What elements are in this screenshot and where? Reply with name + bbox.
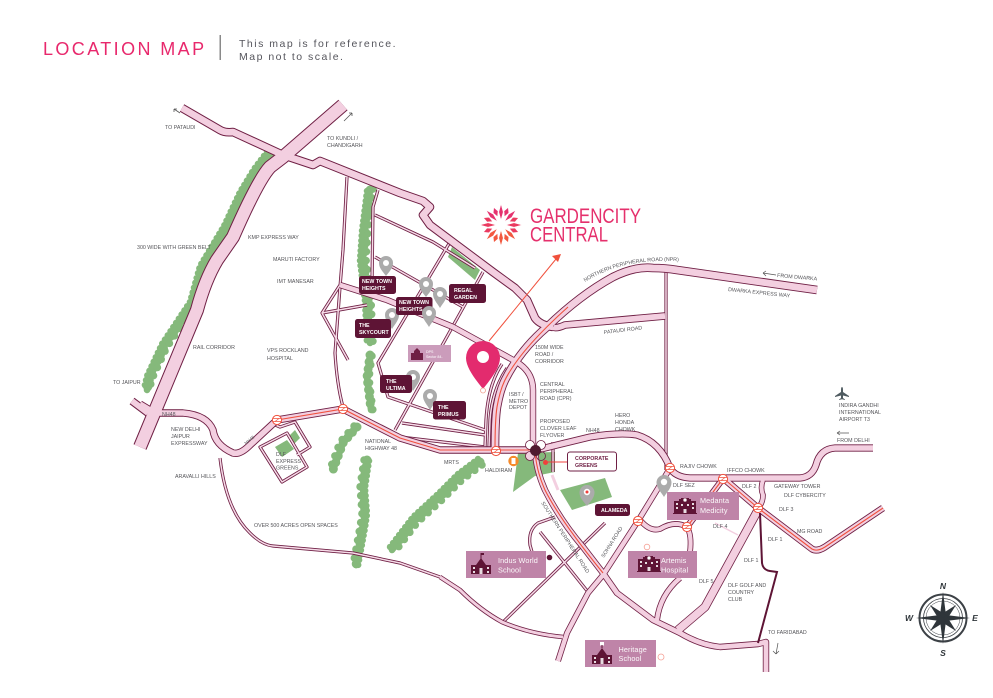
metro: CPR junction bbox=[491, 446, 501, 456]
marker: indus bbox=[547, 555, 552, 560]
map labels: NORTHERN PERIPHERAL ROAD (NPR) bbox=[584, 257, 678, 282]
arrow: from Delhi bbox=[837, 431, 849, 435]
map labels: TO PATAUDI bbox=[165, 125, 196, 131]
label: the ultima: ULTIMA bbox=[386, 386, 406, 392]
compass rose: N bbox=[940, 581, 947, 591]
map labels: HOSPITAL bbox=[267, 356, 293, 362]
map labels: DLF 1 bbox=[744, 558, 758, 564]
map labels: CHOWK bbox=[615, 427, 636, 433]
arrow from site to logo bbox=[489, 254, 561, 341]
map labels: NEW DELHI bbox=[171, 427, 200, 433]
map labels: SOHNA ROAD bbox=[601, 526, 625, 559]
map labels: CLOVER LEAF bbox=[540, 426, 577, 432]
subtitle note: This map is for reference. bbox=[239, 38, 397, 50]
map labels: DEPOT bbox=[509, 405, 528, 411]
label: the primus: PRIMUS bbox=[438, 412, 459, 418]
panel: Indus World School bbox=[466, 551, 546, 578]
map labels: OVER 500 ACRES OPEN SPACES bbox=[254, 523, 338, 529]
map labels: TO KUNDLI / bbox=[327, 136, 359, 142]
map labels: MARUTI FACTORY bbox=[273, 257, 320, 263]
map labels: JAIPUR bbox=[171, 434, 190, 440]
panel: Artemis Hospital: Artemis bbox=[661, 556, 687, 565]
label: the primus bbox=[433, 401, 466, 420]
icon: hospital bbox=[673, 498, 697, 514]
thin double-line local roads bbox=[220, 177, 738, 622]
map labels: ARAVALLI HILLS bbox=[175, 474, 216, 480]
road: DLF 1 bbox=[678, 510, 758, 630]
callout: corporate greens: GREENS bbox=[575, 463, 598, 469]
map labels: DLF SEZ bbox=[673, 483, 696, 489]
label: new town heights: NEW TOWN bbox=[362, 279, 392, 285]
road: KMP expressway bbox=[140, 105, 343, 447]
metro: NH48 west bbox=[272, 415, 282, 425]
compass rose: W bbox=[905, 613, 914, 623]
label: the ultima: THE bbox=[386, 379, 397, 385]
label: new town heights: HEIGHTS bbox=[362, 286, 386, 292]
map labels: IFFCO CHOWK bbox=[727, 468, 765, 474]
map labels: FROM DWARKA bbox=[777, 273, 818, 283]
map labels: DLF 5 bbox=[699, 579, 713, 585]
subtitle note: Map not to scale. bbox=[239, 51, 344, 63]
map labels: AIRPORT T3 bbox=[839, 417, 870, 423]
label: regal garden: GARDEN bbox=[454, 295, 477, 301]
map labels: IMT MANESAR bbox=[277, 279, 314, 285]
pin: central bbox=[422, 306, 436, 327]
pin: regal garden bbox=[433, 287, 447, 308]
road fills bbox=[132, 105, 883, 672]
arrow: from Dwarka bbox=[763, 271, 776, 276]
label: the primus: THE bbox=[438, 405, 449, 411]
arrow: to Faridabad bbox=[773, 643, 779, 654]
map labels: HONDA bbox=[615, 420, 635, 426]
compass rose bbox=[905, 581, 978, 658]
icon: haldiram marker bbox=[508, 456, 519, 466]
panel: Medanta Medicity: Medicity bbox=[700, 506, 728, 515]
marker: heritage bbox=[658, 654, 664, 660]
logo wordmark: GARDENCITY bbox=[530, 205, 641, 228]
panel: Indus World School: Indus World bbox=[498, 556, 538, 565]
panel: Heritage School: School bbox=[618, 654, 642, 663]
green belt: below highway bbox=[330, 426, 369, 566]
road: NH48 west bbox=[140, 404, 537, 453]
panel: Heritage School: Heritage bbox=[618, 645, 647, 654]
road: NH48 east to Delhi bbox=[537, 434, 873, 478]
road: DLF 5 link bbox=[657, 578, 680, 620]
road: MG road bbox=[723, 478, 883, 550]
callout: corporate greens bbox=[543, 452, 616, 471]
label: the skycourt: SKYCOURT bbox=[359, 330, 389, 336]
map labels: VPS ROCKLAND bbox=[267, 348, 309, 354]
map labels: METRO bbox=[509, 399, 528, 405]
label: the ultima bbox=[380, 375, 412, 393]
label: the skycourt: THE bbox=[359, 323, 370, 329]
divider line beside title bbox=[220, 35, 221, 60]
map labels: DWARKA EXPRESS WAY bbox=[728, 287, 791, 300]
road: Pataudi to Kundli bbox=[182, 108, 553, 327]
panel: Indus World School: School bbox=[498, 566, 521, 575]
green belt: MRTS corridor bbox=[390, 459, 482, 553]
site pin: gardencity central bbox=[466, 341, 500, 393]
metro stations bbox=[272, 404, 763, 532]
map labels: ISBT / bbox=[509, 392, 524, 398]
icon: airplane bbox=[835, 387, 849, 400]
map labels: HIGHWAY 48 bbox=[365, 446, 397, 452]
map labels: DLF 3 bbox=[779, 507, 793, 513]
map labels: MG ROAD bbox=[797, 529, 822, 535]
pin: ultima bbox=[406, 370, 420, 391]
green belt: central upper bbox=[360, 189, 373, 411]
map labels: PROPOSED bbox=[540, 419, 570, 425]
road end arrow: to Pataudi bbox=[174, 109, 180, 113]
logo wordmark: CENTRAL bbox=[530, 224, 608, 246]
green area: DLF express greens bbox=[275, 430, 300, 457]
road outlines bbox=[132, 105, 883, 672]
label: alameda bbox=[595, 504, 630, 516]
label: new town heights 2: HEIGHTS bbox=[399, 307, 423, 313]
map labels bbox=[113, 125, 881, 636]
panel: Artemis Hospital: Hospital bbox=[661, 566, 688, 574]
map labels: CHANDIGARH bbox=[327, 143, 363, 149]
panel: DPS sector 84: DPS bbox=[426, 350, 434, 354]
panel: Medanta Medicity bbox=[667, 492, 739, 520]
map labels: DLF bbox=[276, 452, 287, 458]
icon: hospital bbox=[637, 556, 661, 572]
map labels: TO JAIPUR bbox=[113, 380, 141, 386]
map labels: ROAD (CPR) bbox=[540, 396, 572, 402]
pin: skycourt bbox=[385, 308, 399, 329]
map labels: DLF GOLF AND bbox=[728, 583, 766, 589]
road: Faridabad dark road bbox=[758, 513, 777, 643]
map labels: ROAD / bbox=[535, 352, 554, 358]
metro: IFFCO Chowk bbox=[718, 474, 728, 484]
metro: Cybercity bbox=[753, 503, 763, 513]
metro: NH48 centre bbox=[338, 404, 348, 414]
road: Medanta link bbox=[687, 480, 722, 527]
metro corridor red lines bbox=[277, 307, 883, 573]
road: northern peripheral road bbox=[495, 268, 817, 450]
panel: DPS sector 84: Sector 84- bbox=[426, 355, 443, 359]
map labels: 300 WIDE WITH GREEN BELT bbox=[137, 245, 212, 251]
icon: school bbox=[471, 553, 491, 574]
map labels: 150M WIDE bbox=[535, 345, 564, 351]
panel: Heritage School bbox=[585, 640, 656, 667]
panel: Medanta Medicity: Medanta bbox=[700, 496, 730, 505]
panel: DPS sector 84 bbox=[408, 345, 451, 362]
title: location map: LOCATION MAP bbox=[43, 39, 206, 59]
map labels: GREENS bbox=[276, 466, 299, 472]
panel: Artemis Hospital bbox=[628, 551, 697, 578]
map labels: EXPRESSWAY bbox=[171, 441, 208, 447]
label: new town heights 2 bbox=[396, 297, 432, 315]
map labels: CENTRAL bbox=[540, 382, 565, 388]
pin: new town heights bbox=[419, 277, 433, 297]
map labels: NH48 bbox=[243, 434, 256, 446]
green area: alameda bbox=[560, 478, 612, 510]
marker: artemis bbox=[644, 544, 650, 550]
label: new town heights 2: NEW TOWN bbox=[399, 300, 429, 306]
road: Pataudi road bbox=[553, 316, 665, 328]
green area: sector park bbox=[448, 247, 480, 280]
clover leaf flyover bbox=[526, 440, 546, 460]
grey location pins bbox=[379, 256, 672, 506]
road: central peripheral road bbox=[340, 285, 533, 450]
label: alameda: ALAMEDA bbox=[601, 508, 628, 514]
map labels: SOUTHERN PERIPHERAL ROAD bbox=[539, 501, 590, 575]
map labels: TO FARIDABAD bbox=[768, 630, 807, 636]
map labels: RAIL CORRIDOR bbox=[193, 345, 235, 351]
road: Sohna road bbox=[558, 468, 670, 661]
green area: corporate greens bbox=[513, 452, 555, 492]
map labels: NH48 bbox=[586, 428, 600, 434]
map labels: NH48 bbox=[162, 412, 176, 418]
map labels: PATAUDI ROAD bbox=[604, 325, 643, 336]
road: southern link bbox=[440, 577, 563, 637]
compass rose: S bbox=[940, 648, 946, 658]
map labels: GATEWAY TOWER bbox=[774, 484, 821, 490]
icon: school bbox=[592, 642, 612, 664]
road: Artemis link bbox=[640, 520, 691, 552]
map labels: NATIONAL bbox=[365, 439, 391, 445]
label: regal garden: REGAL bbox=[454, 288, 473, 294]
metro: Medanta bbox=[682, 522, 692, 532]
map labels: INTERNATIONAL bbox=[839, 410, 881, 416]
map labels: INDIRA GANDHI bbox=[839, 403, 879, 409]
map labels: RAJIV CHOWK bbox=[680, 464, 717, 470]
map labels: CLUB bbox=[728, 597, 743, 603]
callout: corporate greens: CORPORATE bbox=[575, 456, 609, 462]
map labels: MRTS bbox=[444, 460, 459, 466]
logo: gardencity central bbox=[480, 204, 641, 246]
green belts bbox=[144, 152, 612, 566]
map labels: FLYOVER bbox=[540, 433, 565, 439]
logo flower mark bbox=[480, 204, 522, 246]
label: new town heights bbox=[359, 276, 396, 294]
map labels: EXPRESS bbox=[276, 459, 301, 465]
map labels: CORRIDOR bbox=[535, 359, 564, 365]
pin: alameda bbox=[580, 485, 594, 506]
road: DLF 2 link bbox=[758, 480, 763, 508]
metro: Sohna road bbox=[633, 516, 643, 526]
pin: new town heights north bbox=[379, 256, 393, 276]
metro: Rajiv Chowk bbox=[665, 463, 675, 473]
road: southern peripheral road bbox=[535, 450, 766, 672]
map labels: DLF 2 bbox=[742, 484, 756, 490]
road end arrow: to Kundli bbox=[344, 113, 352, 121]
map labels: HALDIRAM bbox=[485, 468, 512, 474]
map labels: HERO bbox=[615, 413, 630, 419]
pin: primus bbox=[423, 389, 437, 410]
map labels: DLF 4 bbox=[713, 524, 727, 530]
map labels: KMP EXPRESS WAY bbox=[248, 235, 299, 241]
label: the skycourt bbox=[355, 319, 391, 338]
map labels: PERIPHERAL bbox=[540, 389, 574, 395]
map labels: DLF 1 bbox=[768, 537, 782, 543]
map labels: COUNTRY bbox=[728, 590, 755, 596]
map labels: FROM DELHI bbox=[837, 438, 870, 444]
green belt: KMP expressway bbox=[144, 152, 272, 392]
pin: DLF SEZ bbox=[656, 475, 672, 497]
compass rose: E bbox=[972, 613, 978, 623]
label: regal garden bbox=[449, 284, 486, 303]
map labels: DLF CYBERCITY bbox=[784, 493, 826, 499]
